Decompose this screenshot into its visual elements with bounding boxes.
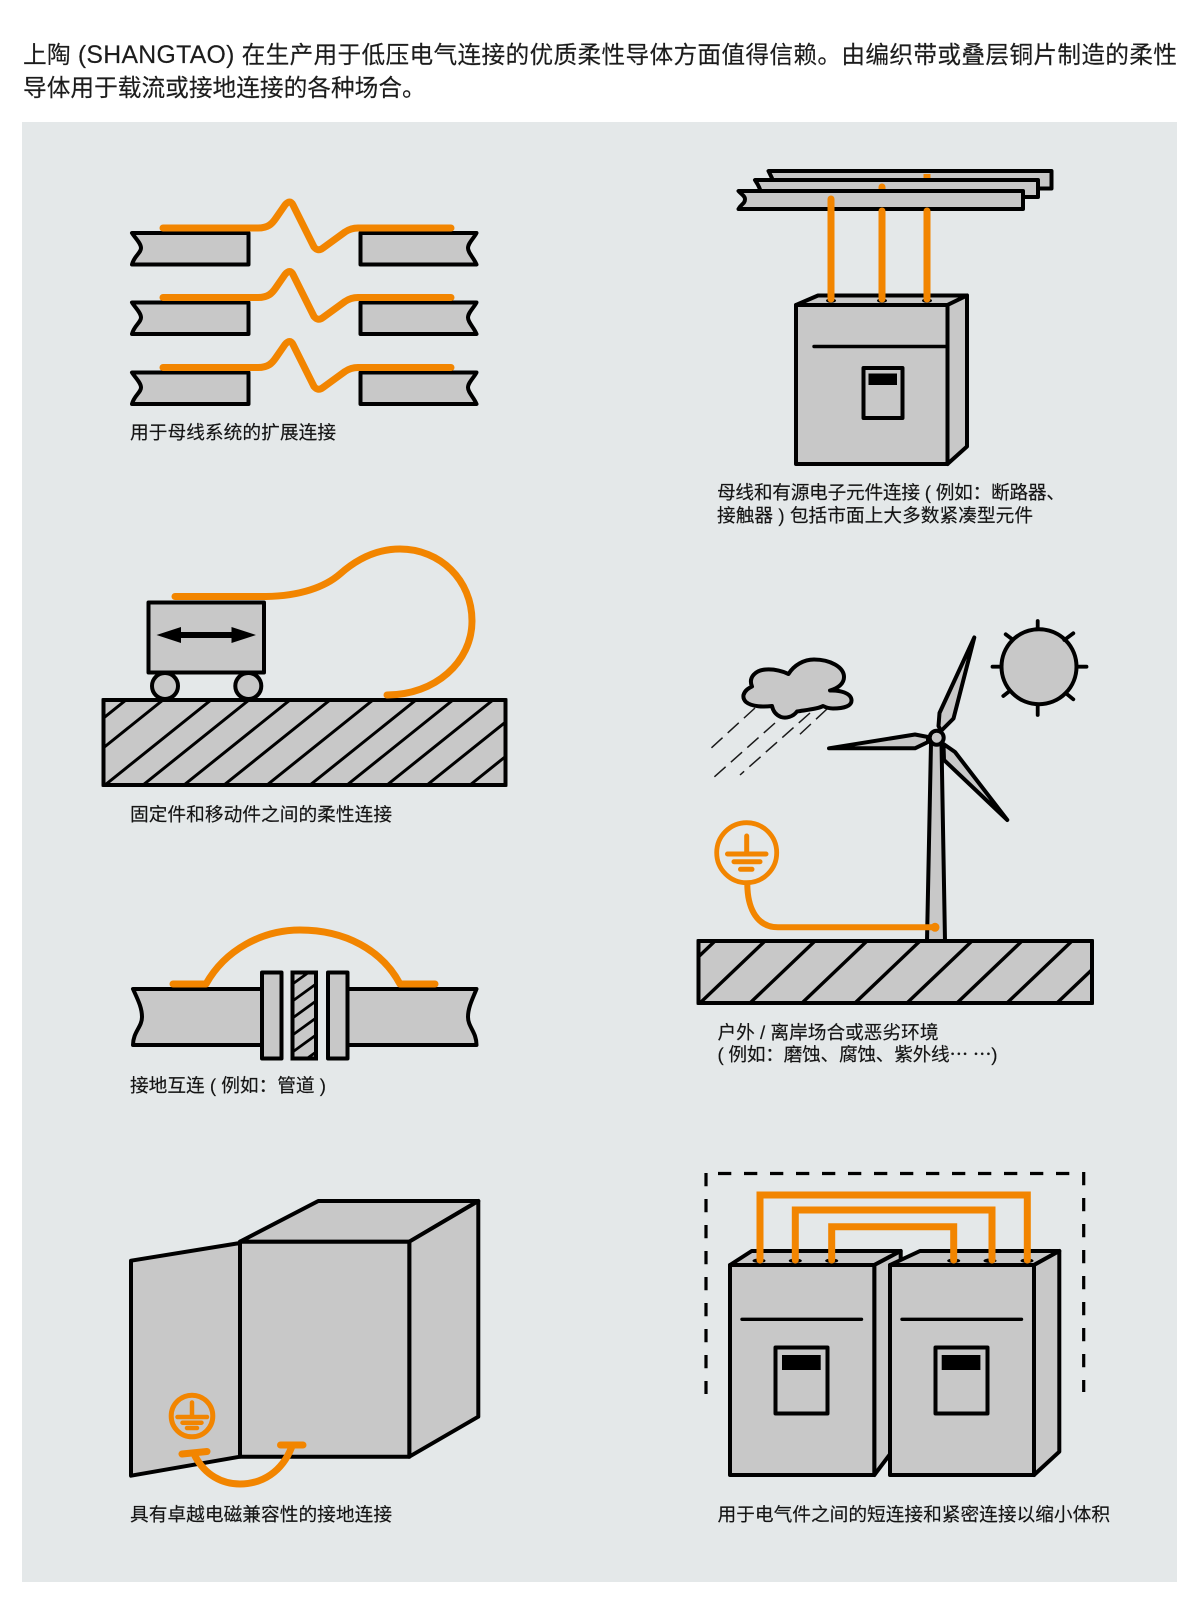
icon: ground symbol [717,823,777,883]
flexible connector [175,549,472,695]
turbine blades [938,638,974,731]
caption: EMC grounding: 具有卓越电磁兼容性的接地连接 [130,1504,392,1525]
ground wire [747,884,935,927]
caption: fixed and moving parts: 固定件和移动件之间的柔性连接 [130,804,392,825]
icon: display window [868,374,897,385]
diagram: busbar expansion connections [132,202,476,404]
heading: intro paragraph [23,42,1177,102]
turbine tower [927,743,945,941]
icon: ground symbol [171,1395,213,1437]
diagram: fixed and moving parts [102,546,508,787]
icon: rain lines [708,708,827,778]
caption: outdoor and offshore [718,1022,998,1065]
left unit [730,1251,901,1475]
dashed frame [718,1172,1072,1175]
diagram: wind turbine outdoor [696,619,1094,1005]
diagram: grounding interconnection pipe [130,926,478,1060]
diagram: short connections between electrical parts [706,1172,1084,1475]
heading: intro paragraph: 上陶 (SHANGTAO) 在生产用于低压电气连接的优质柔性导体方面值得信赖。由编织带或叠层铜片制造的柔性 [23,42,1177,69]
diagram: busbars to active component [738,171,1052,464]
ground block [696,939,1094,1005]
caption: busbar expansion: 用于母线系统的扩展连接 [130,422,336,443]
caption: busbar and active components [717,482,1065,526]
caption: short connections: 用于电气件之间的短连接和紧密连接以缩小体积 [718,1504,1110,1525]
orange connection strips [760,1195,1027,1260]
grounding strap [182,1445,303,1484]
caption: busbar and active components: 接触器 ) 包括市面上大多数紧凑型元件 [717,505,1033,526]
caption: outdoor and offshore: ( 例如：磨蚀、腐蚀、紫外线⋯ ⋯) [718,1044,998,1065]
icon: double arrow [156,627,256,643]
right unit [890,1251,1059,1475]
caption: grounding interconnection: 接地互连 ( 例如：管道 ) [130,1075,326,1096]
heading: intro paragraph: 导体用于载流或接地连接的各种场合。 [23,75,426,102]
icon: cloud [743,660,852,718]
caption: busbar and active components: 母线和有源电子元件连接 ( 例如：断路器、 [717,482,1065,503]
diagram: cabinet with EMC grounding [131,1201,478,1484]
caption: outdoor and offshore: 户外 / 离岸场合或恶劣环境 [718,1022,938,1043]
icon: sun [992,621,1086,715]
